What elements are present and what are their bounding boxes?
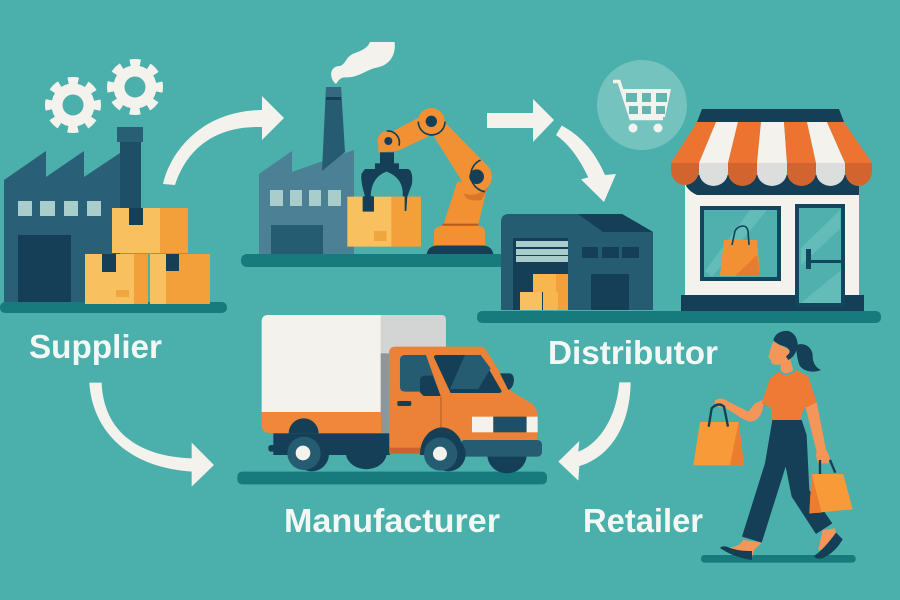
- pants: [742, 420, 832, 543]
- boxes: supplier stack: [85, 208, 210, 304]
- awning: [671, 122, 872, 186]
- panel: robot arm and box: [347, 108, 493, 254]
- arrow: distributor down to truck: [558, 382, 631, 481]
- icon: smoke: [331, 42, 395, 84]
- icon: gripper: [361, 152, 412, 212]
- boxes: warehouse: [520, 274, 568, 310]
- arrow: supplier down to truck: [89, 383, 214, 487]
- arrow: curved down to warehouse: [556, 126, 616, 202]
- forward arm and bag: [693, 399, 763, 465]
- panel: manufacturer factory: [241, 42, 511, 267]
- arrow: manufacturer to warehouse straight: [487, 99, 554, 142]
- shirt: [762, 370, 817, 420]
- store window with bag: [702, 208, 779, 279]
- panel: shopper: [693, 331, 856, 563]
- shoes: [720, 528, 843, 560]
- truck wheels: [287, 437, 466, 471]
- icon: gears: [49, 63, 159, 129]
- label: Supplier: Supplier: [29, 328, 162, 365]
- rear arm: [805, 402, 830, 463]
- panel: retail store: [671, 109, 872, 311]
- rear bag: [809, 460, 853, 513]
- label: Manufacturer: Manufacturer: [284, 502, 500, 539]
- icon: shopping cart: [597, 60, 687, 150]
- store door: [797, 206, 843, 305]
- arrow: supplier to manufacturer: [163, 96, 284, 185]
- truck cab: [389, 347, 537, 453]
- panel: delivery truck: [237, 315, 547, 484]
- panel: distributor warehouse: [477, 214, 881, 323]
- label: Distributor: Distributor: [548, 334, 718, 371]
- label: Retailer: Retailer: [583, 502, 703, 539]
- head and hair: [768, 331, 821, 373]
- panel: supplier factory: [0, 127, 227, 313]
